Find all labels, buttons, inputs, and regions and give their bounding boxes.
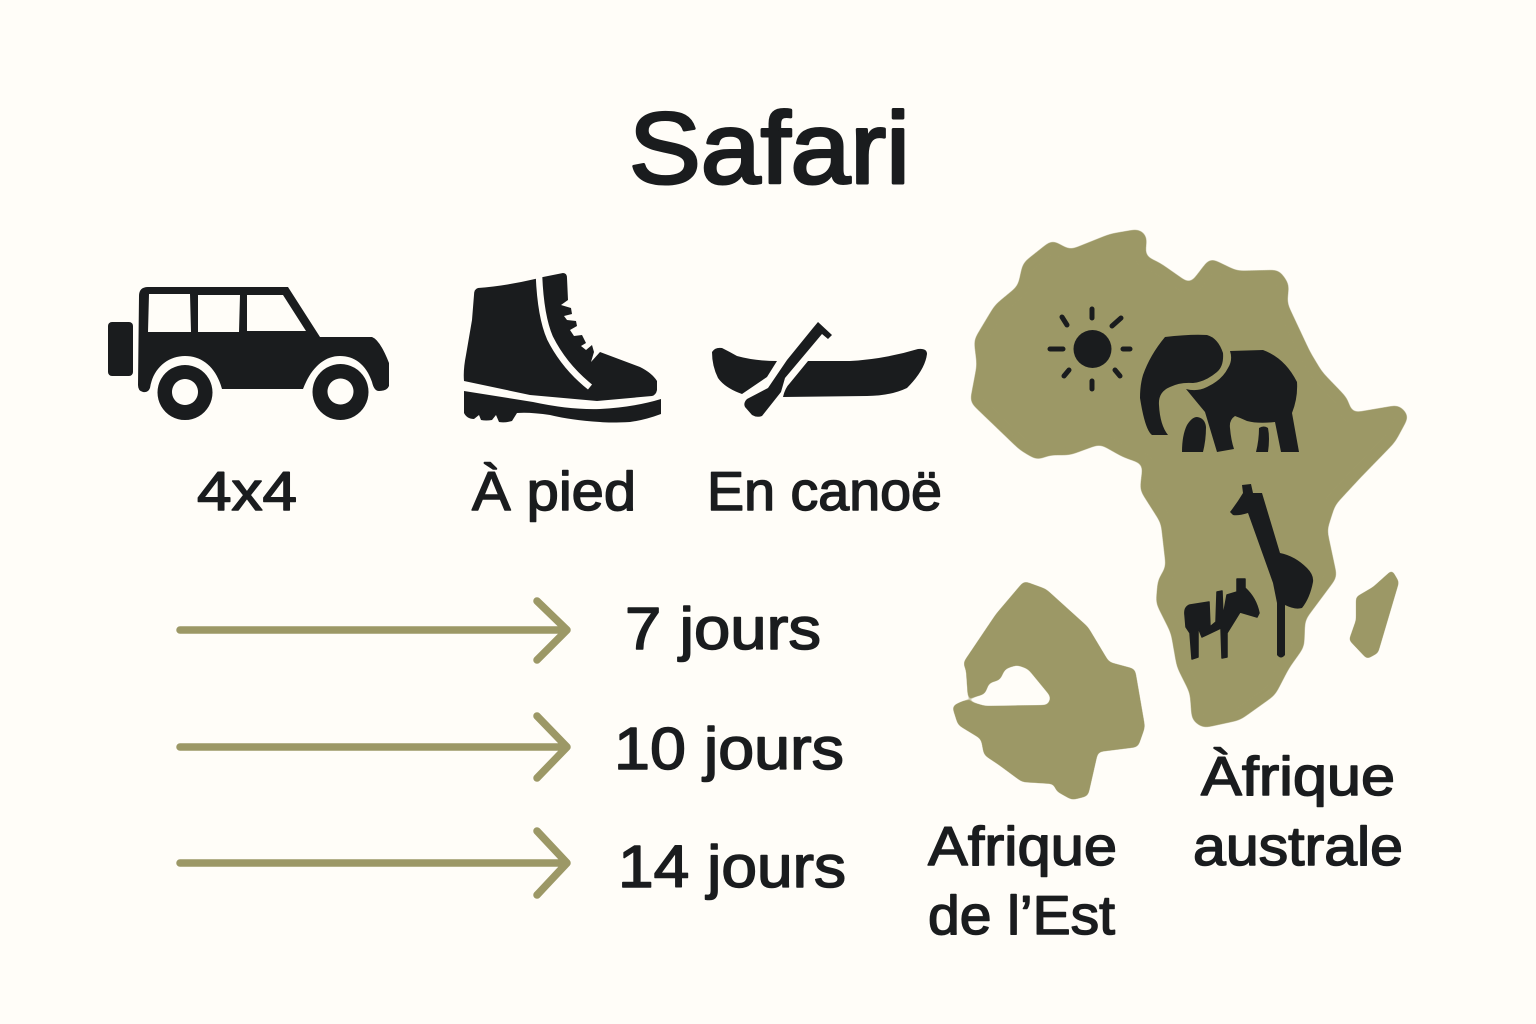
label: 4x4: 4x4 — [197, 460, 297, 522]
duration: 7 jours: 7 jours — [625, 596, 821, 662]
label: Afrique australe — [1193, 745, 1403, 877]
label: à pied: À pied — [472, 460, 636, 522]
icon: 4x4 vehicle — [108, 287, 389, 420]
arrow: 14 jours — [180, 831, 567, 895]
icon: sun — [1050, 309, 1130, 389]
map: Madagascar — [1349, 570, 1399, 659]
label: Afrique australe: australe — [1193, 815, 1403, 877]
icon: hiking boot — [464, 273, 661, 422]
label: Afrique de l'Est: Afrique — [928, 815, 1117, 877]
label: en canoë: En canoë — [707, 460, 942, 522]
duration: 10 jours: 10 jours — [614, 716, 844, 782]
title: Safari — [629, 93, 910, 205]
duration: 14 jours: 14 jours — [618, 834, 846, 900]
label: Afrique de l'Est: de l’Est — [928, 884, 1115, 946]
icon: zebra — [1185, 579, 1259, 659]
map: East Africa — [952, 581, 1145, 800]
label: Afrique de l'Est — [928, 815, 1117, 946]
icon: canoe with paddle — [712, 322, 927, 417]
map: Africa — [970, 229, 1409, 728]
arrow: 10 jours — [180, 716, 567, 778]
arrow: 7 jours — [180, 601, 567, 660]
icon: giraffe — [1230, 484, 1313, 658]
icon: elephant — [1140, 335, 1299, 452]
boot collar line — [539, 276, 590, 387]
label: Afrique australe: Àfrique — [1201, 745, 1395, 807]
